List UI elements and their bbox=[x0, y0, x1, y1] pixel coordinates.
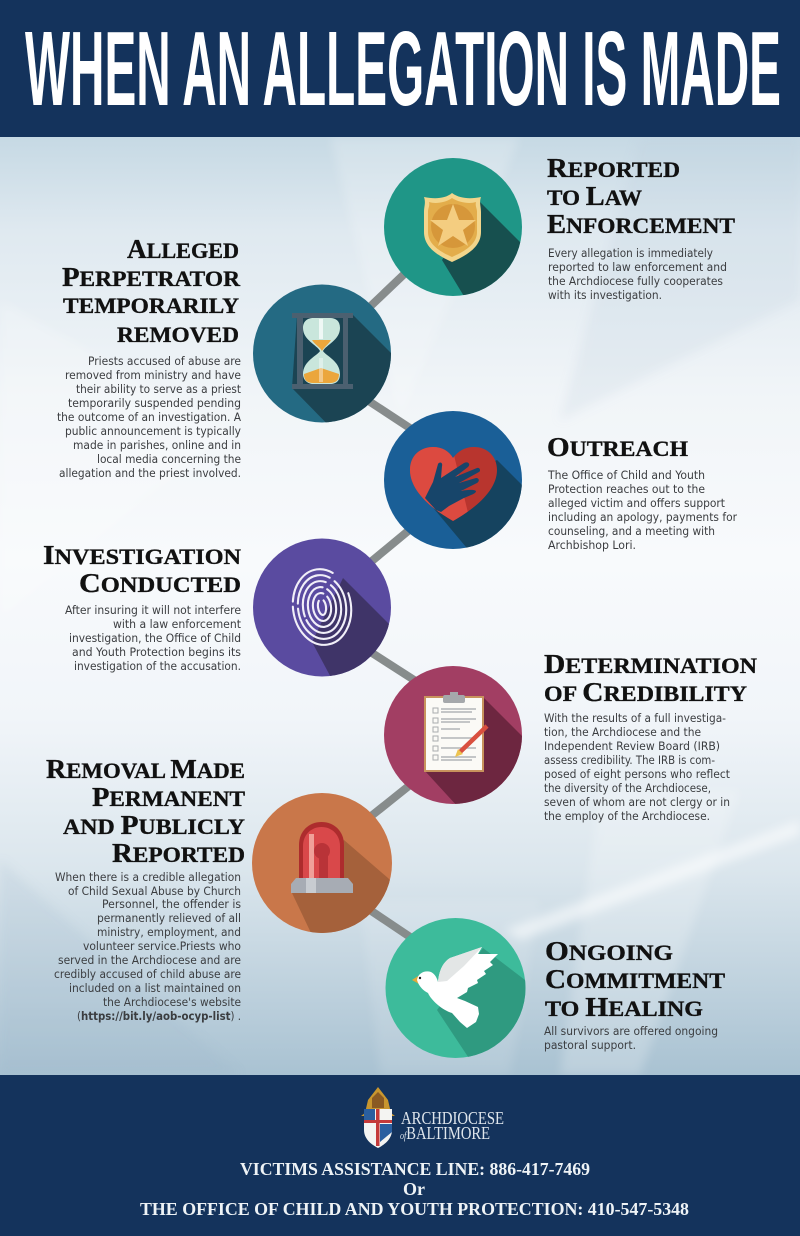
body text: investigation, the Office of Child bbox=[69, 631, 241, 645]
heading bbox=[545, 936, 725, 1022]
contact lines: VICTIMS ASSISTANCE LINE: 886-417-7469 bbox=[240, 1159, 590, 1179]
body text: All survivors are offered ongoing bbox=[544, 1024, 718, 1038]
body text: counseling, and a meeting with bbox=[548, 524, 715, 538]
step: Determination of Credibility bbox=[544, 649, 757, 823]
body text bbox=[65, 603, 242, 673]
body text: included on a list maintained on bbox=[69, 981, 241, 995]
body text: temporarily suspended pending bbox=[68, 396, 241, 410]
body text: Independent Review Board (IRB) bbox=[544, 739, 720, 753]
body text: removed from ministry and have bbox=[65, 368, 241, 382]
logo: Archdiocese of Baltimore: ARCHDIOCESE bbox=[401, 1108, 504, 1128]
heading: TEMPORARILY bbox=[63, 293, 239, 318]
body text bbox=[54, 870, 241, 1023]
heading: ONGOING bbox=[545, 936, 673, 966]
body text bbox=[544, 711, 730, 823]
icon circle: clipboard bbox=[384, 666, 522, 804]
heading bbox=[46, 754, 245, 868]
step: Investigation Conducted bbox=[43, 540, 242, 673]
body text: served in the Archdiocese and are bbox=[58, 953, 241, 967]
icon circle: hourglass bbox=[253, 284, 391, 422]
contact lines bbox=[140, 1159, 689, 1219]
icon: clipboard bbox=[425, 692, 487, 771]
body text: ministry, employment, and bbox=[97, 925, 241, 939]
icon: badge bbox=[424, 193, 481, 262]
heading: ALLEGED bbox=[127, 234, 239, 264]
body text: Every allegation is immediately bbox=[548, 246, 713, 260]
icon: heart bbox=[410, 447, 497, 521]
heading: AND PUBLICLY bbox=[63, 810, 245, 840]
heading: TO HEALING bbox=[545, 992, 703, 1022]
body text: the outcome of an investigation. A bbox=[57, 410, 241, 424]
body text bbox=[548, 246, 727, 302]
body text: investigation of the accusation. bbox=[74, 659, 241, 673]
icon circle: siren bbox=[252, 793, 440, 973]
body text: with its investigation. bbox=[548, 288, 662, 302]
icon: siren bbox=[291, 822, 353, 893]
body text: With the results of a full investiga- bbox=[544, 711, 726, 725]
body text: public announcement is typically bbox=[65, 424, 241, 438]
body text: with a law enforcement bbox=[113, 617, 242, 631]
heading: DETERMINATION bbox=[544, 649, 757, 679]
body text: volunteer service.Priests who bbox=[83, 939, 241, 953]
heading: REPORTED bbox=[547, 153, 680, 183]
logo: Archdiocese of Baltimore: ofBALTIMORE bbox=[400, 1123, 490, 1143]
body text bbox=[57, 354, 241, 480]
heading bbox=[43, 540, 241, 598]
body text: tion, the Archdiocese and the bbox=[544, 725, 701, 739]
body text bbox=[547, 468, 737, 552]
step: Removal Made Permanent and Publicly Reported bbox=[46, 754, 245, 1023]
heading: PERPETRATOR bbox=[62, 262, 241, 292]
body text: permanently relieved of all bbox=[97, 911, 241, 925]
icon: fingerprint bbox=[288, 565, 356, 649]
body text: Priests accused of abuse are bbox=[88, 354, 241, 368]
heading bbox=[544, 649, 757, 707]
footer band bbox=[0, 1075, 800, 1236]
body text: the diversity of the Archdiocese, bbox=[544, 781, 711, 795]
icon: dove bbox=[412, 947, 498, 1028]
logo: Archdiocese of Baltimore bbox=[361, 1087, 504, 1148]
contact lines: THE OFFICE OF CHILD AND YOUTH PROTECTION: 410-547-5348 bbox=[140, 1199, 689, 1219]
heading: REMOVED bbox=[117, 322, 239, 347]
body text: alleged victim and offers support bbox=[548, 496, 725, 510]
body text: and Youth Protection begins its bbox=[72, 645, 241, 659]
body text: Archbishop Lori. bbox=[548, 538, 636, 552]
body text: local media concerning the bbox=[97, 452, 241, 466]
body text: made in parishes, online and in bbox=[73, 438, 241, 452]
heading: OUTREACH bbox=[547, 432, 688, 462]
body text: their ability to serve as a priest bbox=[76, 382, 241, 396]
body text: posed of eight persons who reflect bbox=[544, 767, 730, 781]
background panel bbox=[0, 137, 800, 1075]
step: Outreach bbox=[547, 432, 737, 552]
heading: REMOVAL MADE bbox=[46, 754, 245, 784]
heading: REPORTED bbox=[112, 838, 245, 868]
contact lines: Or bbox=[403, 1179, 425, 1199]
heading: INVESTIGATION bbox=[43, 540, 241, 570]
body text: the Archdiocese fully cooperates bbox=[548, 274, 723, 288]
body text: including an apology, payments for bbox=[548, 510, 737, 524]
heading: COMMITMENT bbox=[545, 964, 725, 994]
connector lines bbox=[335, 240, 440, 947]
heading: TO LAW bbox=[547, 181, 642, 211]
icon circle: heart and hand bbox=[384, 411, 522, 549]
step: Reported to Law Enforcement bbox=[547, 153, 735, 302]
icon circle: police badge bbox=[384, 158, 522, 296]
heading: ENFORCEMENT bbox=[547, 209, 735, 239]
body text: pastoral support. bbox=[544, 1038, 636, 1052]
body text: allegation and the priest involved. bbox=[59, 466, 241, 480]
header band bbox=[0, 0, 800, 137]
body text: When there is a credible allegation bbox=[55, 870, 241, 884]
body text: (https://bit.ly/aob-ocyp-list) . bbox=[77, 1009, 241, 1023]
heading: OF CREDIBILITY bbox=[544, 677, 747, 707]
icon circle: dove bbox=[386, 918, 590, 1090]
body text: seven of whom are not clergy or in bbox=[544, 795, 730, 809]
heading: PERMANENT bbox=[92, 782, 245, 812]
body text: reported to law enforcement and bbox=[548, 260, 727, 274]
body text: of Child Sexual Abuse by Church bbox=[68, 884, 241, 898]
heading bbox=[62, 234, 241, 347]
body text: Personnel, the offender is bbox=[102, 897, 241, 911]
heading bbox=[547, 153, 735, 239]
body text: assess credibility. The IRB is com- bbox=[544, 753, 715, 767]
body text: the employ of the Archdiocese. bbox=[544, 809, 710, 823]
body text bbox=[544, 1024, 718, 1052]
icon: hand bbox=[425, 462, 480, 512]
icon circle: fingerprint bbox=[253, 538, 391, 676]
body text: credibly accused of child abuse are bbox=[54, 967, 241, 981]
step: Ongoing Commitment to Healing bbox=[544, 936, 725, 1052]
icon: hourglass bbox=[292, 313, 353, 389]
body text: Protection reaches out to the bbox=[548, 482, 705, 496]
body text: The Office of Child and Youth bbox=[547, 468, 705, 482]
body text: the Archdiocese's website bbox=[103, 995, 241, 1009]
step: Alleged Perpetrator temporarily removed bbox=[57, 234, 241, 480]
body text: After insuring it will not interfere bbox=[65, 603, 241, 617]
heading: CONDUCTED bbox=[79, 568, 241, 598]
